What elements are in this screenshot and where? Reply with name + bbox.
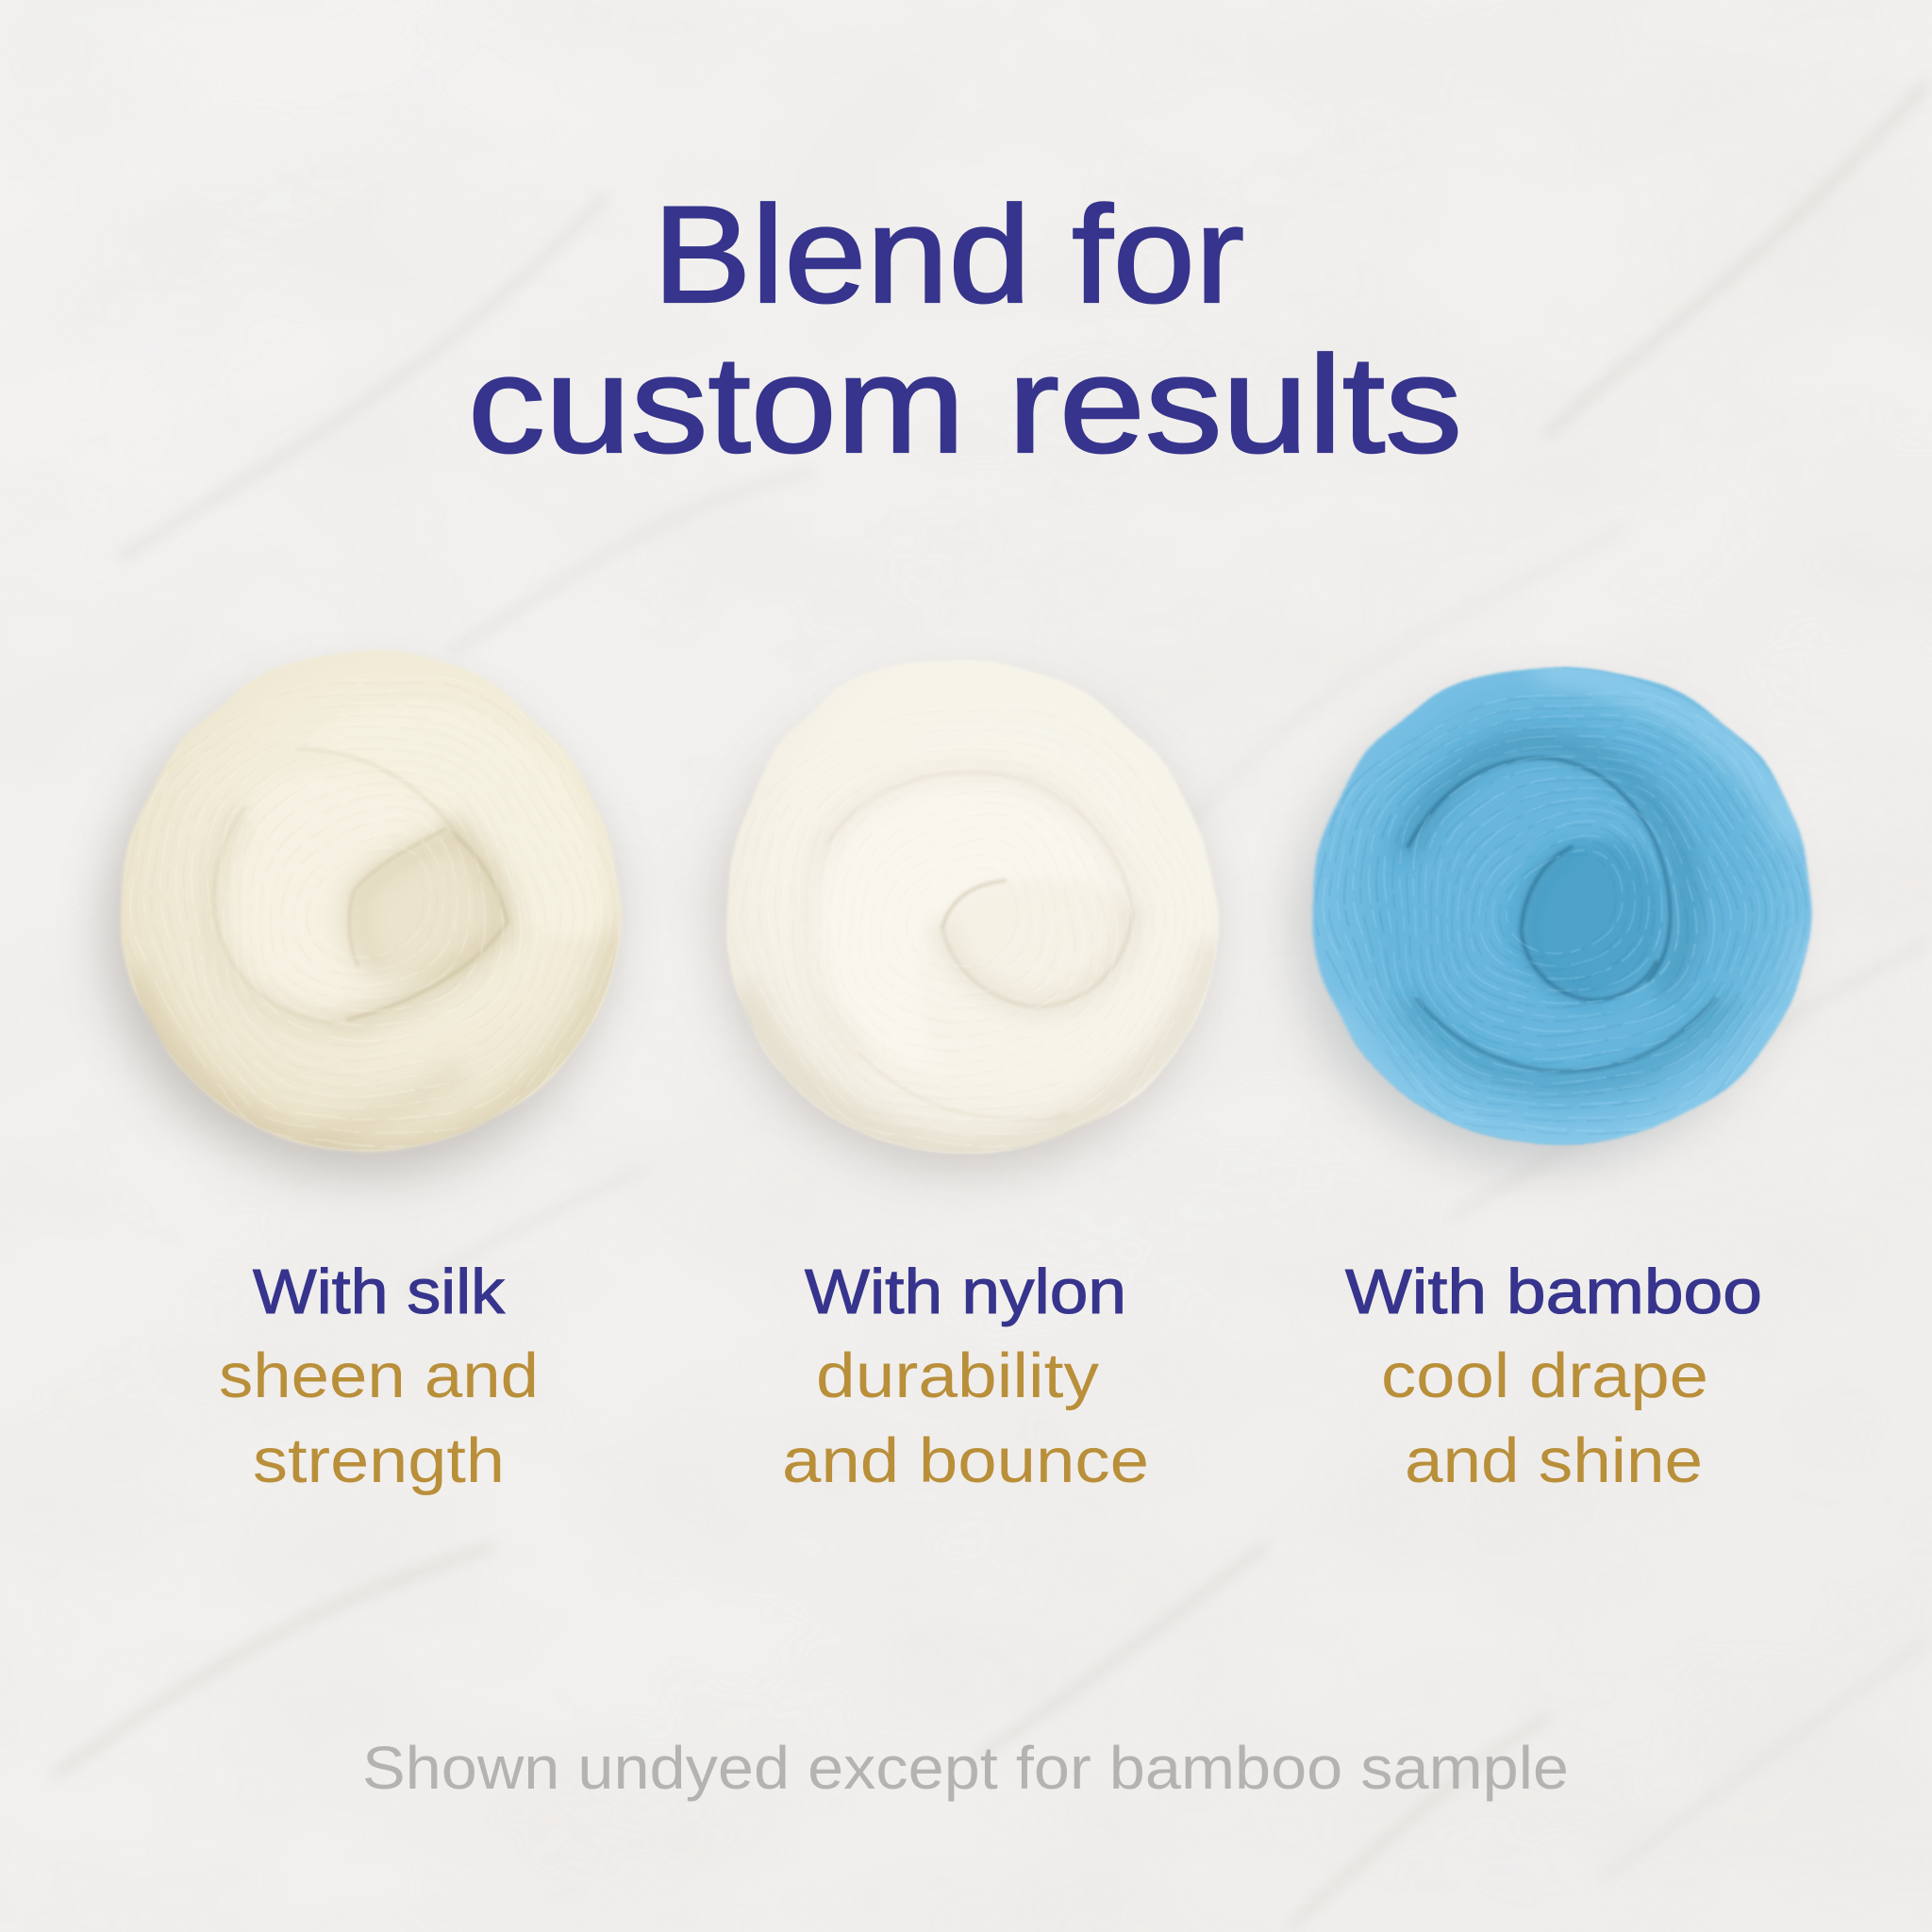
- footnote: Shown undyed except for bamboo sample: [362, 1734, 1569, 1802]
- creases: [213, 749, 508, 1024]
- caption: bamboo: cool drape: [1381, 1341, 1708, 1411]
- upper right strand: [558, 791, 600, 933]
- title: [468, 177, 1462, 481]
- roving swirl: silk: [83, 649, 634, 1198]
- inner coil: [228, 923, 275, 992]
- caption: silk: [219, 1257, 539, 1496]
- creases: [827, 773, 1133, 1119]
- strand shading: [1407, 742, 1724, 1085]
- roving swirl: bamboo: [1228, 597, 1901, 1224]
- roving swirl: nylon: [641, 608, 1299, 1241]
- caption: nylon: durability: [816, 1341, 1100, 1411]
- caption: nylon: and bounce: [782, 1425, 1149, 1496]
- centre knot: [942, 879, 1131, 1007]
- caption: silk: With silk: [253, 1257, 506, 1327]
- title: custom results: [468, 327, 1462, 481]
- centre knot: [353, 836, 503, 982]
- knot: [1522, 839, 1663, 998]
- creases: [1407, 758, 1716, 1072]
- rim highlight: [1337, 672, 1807, 1141]
- title: Blend for: [653, 177, 1244, 331]
- coil body: [1396, 759, 1712, 1068]
- caption: bamboo: [1345, 1257, 1762, 1496]
- caption: bamboo: With bamboo: [1345, 1257, 1762, 1327]
- caption: silk: sheen and: [219, 1341, 539, 1411]
- strand shading: [138, 818, 618, 1154]
- caption: bamboo: and shine: [1405, 1425, 1703, 1496]
- caption: nylon: With nylon: [805, 1257, 1126, 1327]
- strand shading: [747, 773, 1211, 1150]
- caption: nylon: [782, 1257, 1149, 1496]
- caption: silk: strength: [253, 1425, 505, 1496]
- inner coil: [808, 773, 1133, 1073]
